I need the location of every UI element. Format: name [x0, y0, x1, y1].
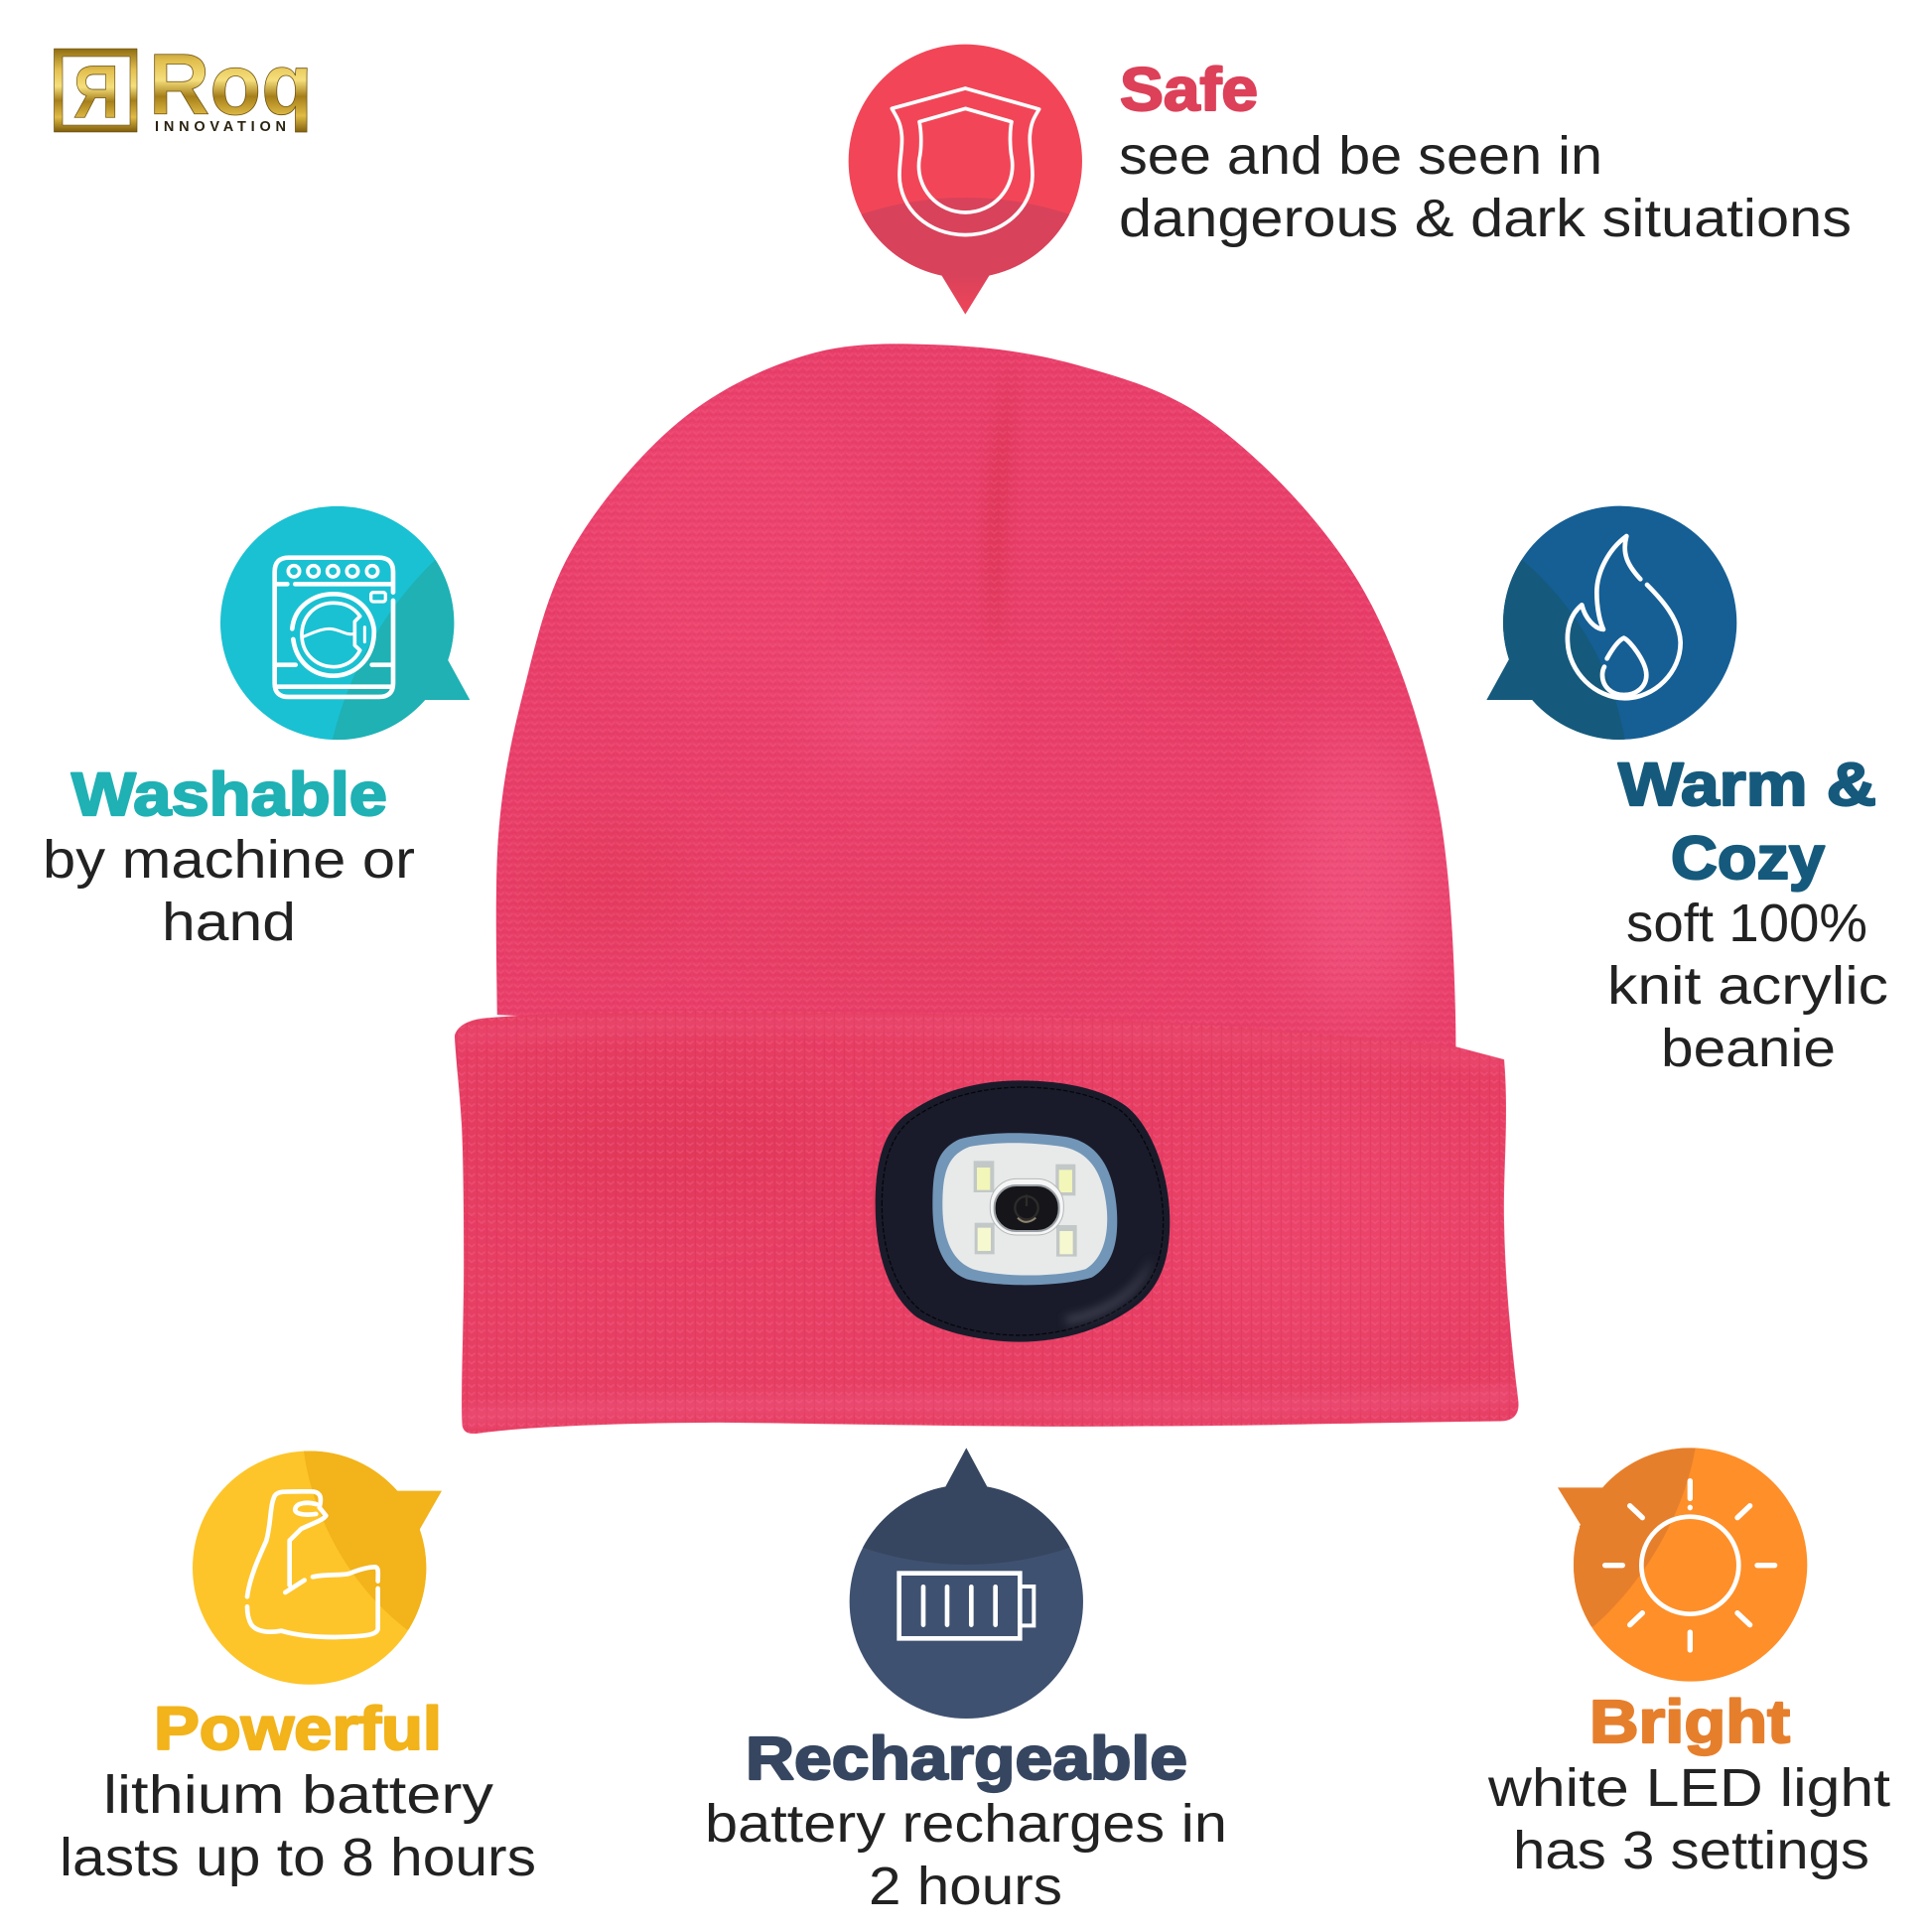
text: Bright description — [1487, 1758, 1890, 1880]
heading: Bright: Bright — [1589, 1688, 1790, 1755]
heading: Warm and Cozy: Cozy — [1671, 824, 1825, 892]
heading: Safe: Safe — [1120, 56, 1258, 123]
logo emblem: framed reversed R: Я — [73, 50, 119, 133]
text: Washable description — [43, 830, 415, 952]
bubble: shield icon — [848, 44, 1082, 314]
feature: Bright — [1487, 1448, 1890, 1880]
LED white panel — [942, 1143, 1107, 1276]
text: Safe description: dangerous & dark situations — [1119, 189, 1852, 248]
feature: Rechargeable — [709, 1448, 1223, 1904]
text: Powerful description: lasts up to 8 hours — [60, 1828, 536, 1887]
heading: Powerful: Powerful — [154, 1695, 442, 1762]
leather surround — [876, 1080, 1170, 1342]
bubble: flame icon — [1469, 506, 1736, 740]
power button — [990, 1178, 1063, 1235]
text: Warm and Cozy description — [1607, 894, 1888, 1078]
text: Bright description: white LED light — [1487, 1758, 1890, 1818]
icon: shield — [892, 88, 1039, 235]
LED chips — [974, 1161, 1077, 1257]
bubble: flexed arm icon — [193, 1450, 467, 1685]
text: Bright description: has 3 settings — [1513, 1821, 1869, 1880]
heading: Warm and Cozy: Warm & — [1618, 751, 1876, 818]
beanie folded cuff — [455, 1011, 1519, 1434]
logo: Roq Innovation — [54, 37, 313, 135]
logo tagline: INNOVATION — [155, 119, 286, 135]
text: Rechargeable description: battery recharges in — [705, 1794, 1227, 1854]
text: Warm and Cozy description: soft 100% — [1626, 894, 1867, 953]
bubble: washing machine icon — [220, 506, 496, 740]
icon: flexed arm — [247, 1491, 378, 1637]
feature: Powerful — [60, 1450, 536, 1887]
text: Warm and Cozy description: beanie — [1661, 1019, 1836, 1078]
text: Powerful description: lithium battery — [103, 1765, 493, 1825]
logo emblem: framed reversed R — [54, 49, 137, 133]
beanie crown — [496, 344, 1455, 1046]
icon: washing machine — [275, 558, 393, 697]
text: Safe description: see and be seen in — [1119, 126, 1602, 186]
logo wordmark: Roq — [149, 37, 313, 133]
bubble: sun icon — [1539, 1448, 1807, 1682]
icon: flame — [1568, 536, 1681, 698]
text: Powerful description — [60, 1765, 536, 1887]
text: Rechargeable description: 2 hours — [869, 1857, 1062, 1916]
feature: Warm and Cozy — [1469, 506, 1888, 1078]
headlamp patch — [876, 1080, 1170, 1342]
text: Rechargeable description — [705, 1794, 1227, 1916]
beanie product photo — [437, 338, 1549, 1450]
text: Warm and Cozy description: knit acrylic — [1607, 956, 1888, 1016]
bubble: battery icon — [850, 1448, 1083, 1719]
text: Washable description: hand — [162, 893, 296, 952]
text: Safe description — [1119, 126, 1852, 248]
heading: Washable: Washable — [71, 760, 387, 828]
heading: Warm and Cozy — [1618, 751, 1876, 892]
icon: sun — [1605, 1481, 1775, 1650]
feature: Washable — [43, 506, 496, 952]
LED lens ring — [932, 1133, 1117, 1285]
icon: battery — [899, 1574, 1034, 1638]
text: Washable description: by machine or — [43, 830, 415, 890]
feature: Safe — [848, 44, 1850, 314]
heading: Rechargeable: Rechargeable — [746, 1725, 1187, 1792]
